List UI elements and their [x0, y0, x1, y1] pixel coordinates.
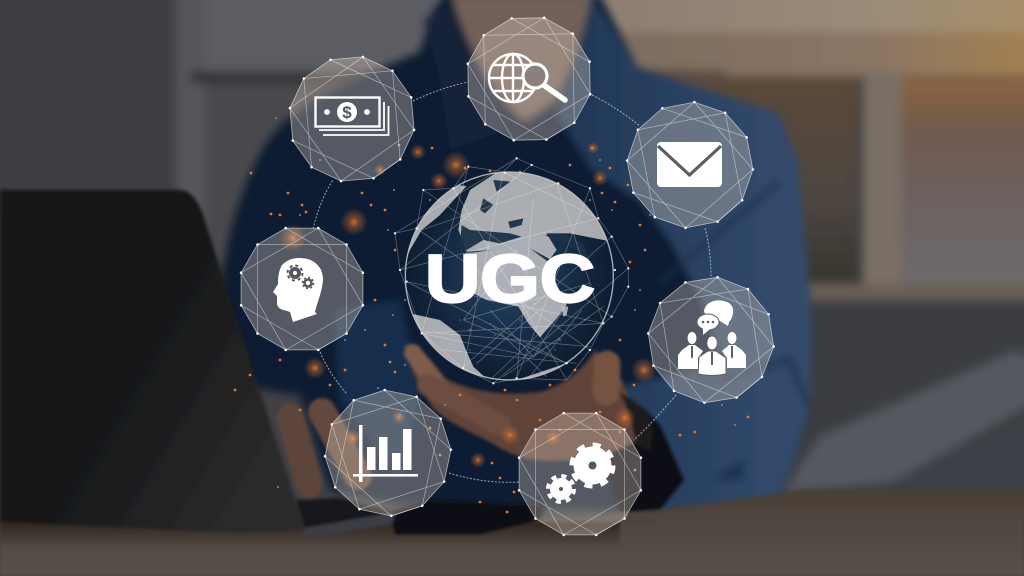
- orange particle dots: [235, 145, 748, 512]
- continents: [407, 172, 607, 380]
- left collar: [424, 0, 505, 150]
- node: settings: [519, 413, 641, 535]
- network nodes: [395, 158, 628, 383]
- icon: globe and magnifier: [489, 54, 565, 102]
- icon: head with gears: [273, 258, 323, 322]
- shirt right shoulder and sleeve: [556, 0, 810, 512]
- node: analytics: [316, 381, 460, 525]
- shirt folds: [659, 183, 808, 405]
- laptop base: [296, 498, 395, 528]
- node: global search: [467, 17, 591, 141]
- icon: team with speech bubbles: [678, 300, 746, 376]
- node: email: [619, 94, 761, 236]
- phone: [390, 500, 545, 535]
- dark seas: [460, 180, 590, 262]
- title: UGC: UGC: [425, 241, 595, 317]
- table: [0, 490, 1024, 576]
- glow particles: [279, 142, 657, 468]
- laptop lid: [0, 190, 305, 533]
- network lines: [395, 158, 628, 383]
- node: money: [286, 53, 418, 185]
- cyan particle dots: [276, 118, 735, 487]
- shirt torso: [220, 0, 810, 512]
- connecting dashed ring arcs: [313, 82, 711, 482]
- icon: bar chart: [353, 425, 418, 482]
- typing fingers: [290, 412, 358, 484]
- dark gap under wrist: [600, 405, 684, 512]
- table shadow under laptop: [0, 522, 620, 548]
- node: team discussion: [641, 270, 781, 410]
- shirt lit left tint: [335, 300, 420, 480]
- watch: [618, 392, 653, 450]
- icon: envelope: [657, 142, 722, 187]
- neck and chest skin: [452, 0, 590, 120]
- central globe: [395, 158, 628, 390]
- hand: [404, 345, 640, 461]
- icon: banknotes: $: [342, 103, 352, 122]
- globe sphere: [405, 172, 613, 380]
- icon: gears: [548, 445, 613, 502]
- node: mind: [241, 228, 363, 350]
